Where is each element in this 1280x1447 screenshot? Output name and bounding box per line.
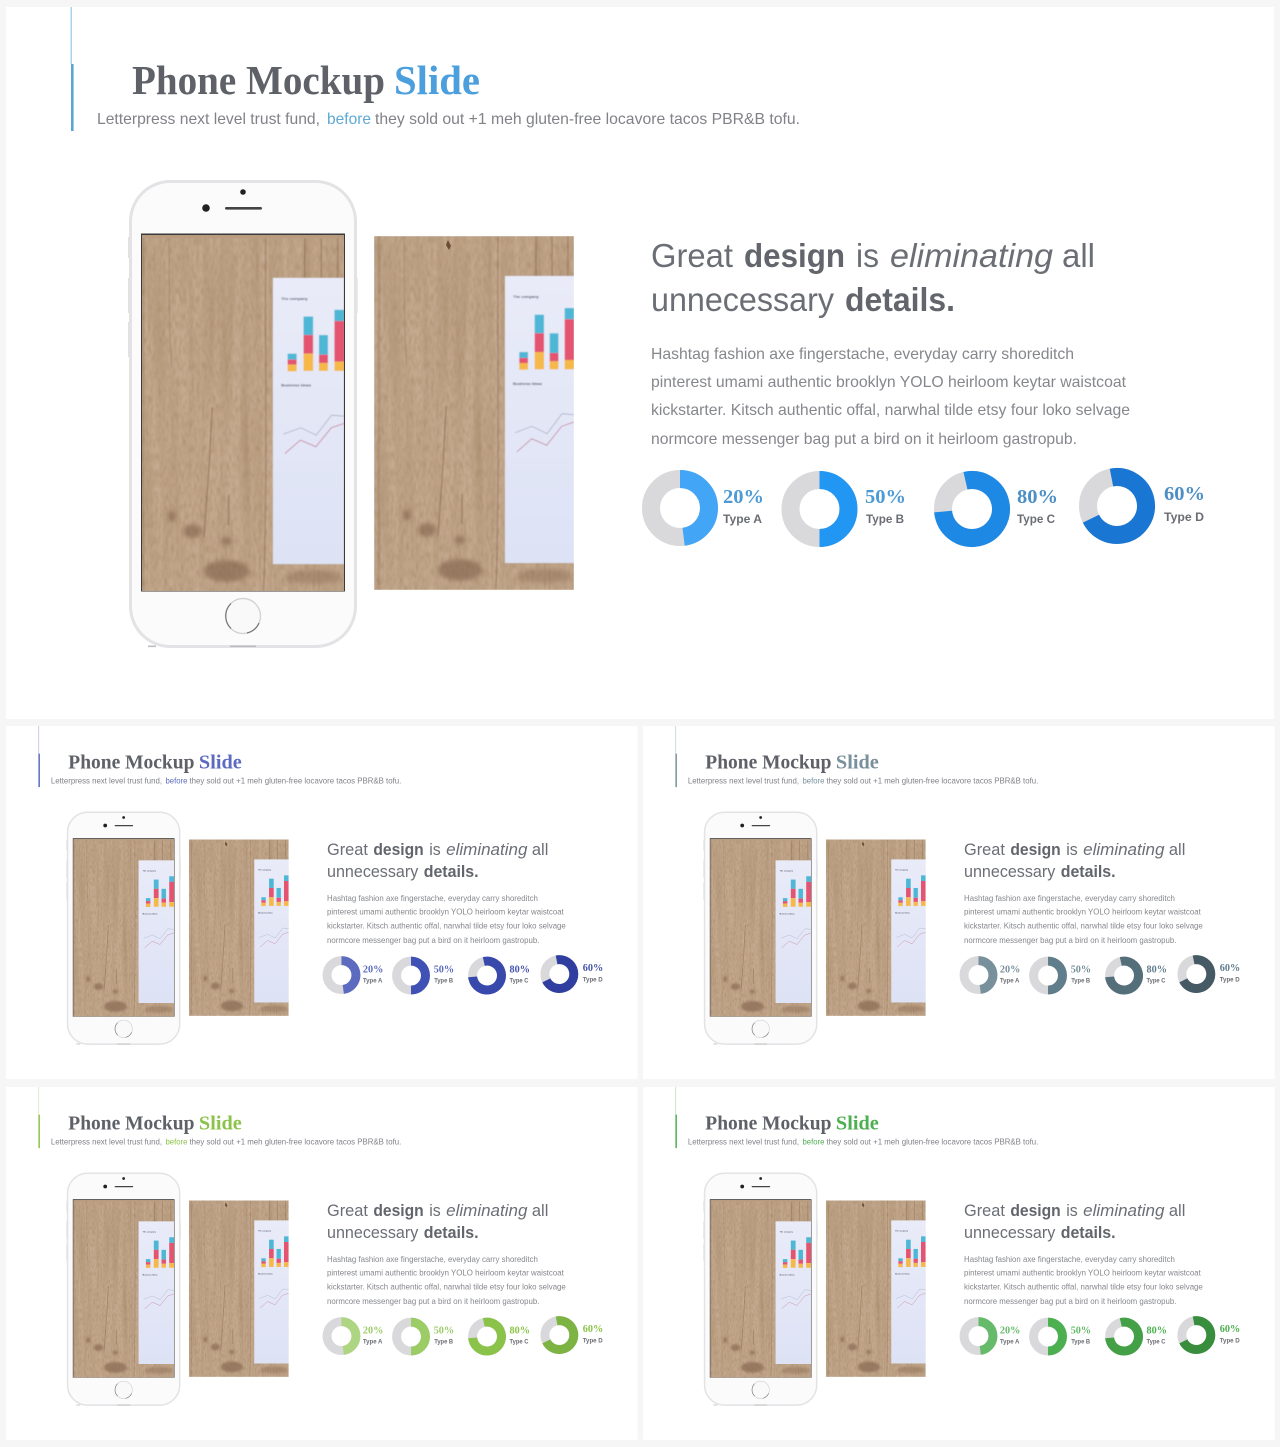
donut: Type C 80%	[470, 958, 530, 993]
heading: is	[1066, 1202, 1078, 1220]
title: Phone Mockup	[68, 1113, 194, 1135]
phone mockup	[128, 182, 358, 648]
heading: Great	[964, 841, 1005, 859]
photo	[189, 839, 289, 1016]
donut: Type A 20%: Type A	[363, 1340, 383, 1346]
donut: Type D 60%: 60%	[1220, 963, 1240, 974]
donut: Type B 50%	[1034, 1322, 1091, 1351]
donut: Type A 20%	[964, 961, 1020, 990]
accent line	[675, 726, 677, 787]
heading: is	[1066, 841, 1078, 859]
donut: Type C 80%: Type C	[1146, 979, 1166, 985]
body text: normcore messenger bag put a bird on it heirloom gastropub.	[651, 431, 1077, 448]
title: Slide	[836, 1113, 879, 1135]
heading: eliminating	[1083, 841, 1164, 859]
heading: details.	[1061, 1224, 1116, 1242]
donut: Type A 20%: 20%	[1000, 1326, 1020, 1337]
title: Slide	[199, 752, 242, 774]
heading	[651, 237, 1095, 318]
subtitle: they sold out +1 meh gluten-free locavore tacos PBR&B tofu.	[189, 1138, 401, 1147]
donut: Type B 50%: 50%	[1071, 1326, 1091, 1337]
body text	[964, 1255, 1203, 1306]
body text: kickstarter. Kitsch authentic offal, narwhal tilde etsy four loko selvage	[327, 1283, 566, 1292]
donut: Type D 60%: 60%	[583, 1324, 603, 1335]
donut: Type C 80%: 80%	[509, 965, 530, 976]
heading	[964, 841, 1185, 881]
heading: unnecessary	[327, 1224, 419, 1242]
donut: Type B 50%	[1034, 961, 1091, 990]
subtitle	[688, 777, 1038, 786]
photo	[374, 236, 574, 590]
donut: Type C 80%: 80%	[1146, 1326, 1167, 1337]
heading: eliminating	[890, 237, 1054, 274]
donut: Type C 80%	[1107, 1319, 1167, 1354]
subtitle: they sold out +1 meh gluten-free locavore tacos PBR&B tofu.	[826, 1138, 1038, 1147]
donut: Type A 20%: 20%	[363, 1326, 383, 1337]
donut: Type A 20%	[327, 961, 383, 990]
donut: Type B 50%: 50%	[434, 965, 454, 976]
donut: Type D 60%: Type D	[583, 978, 603, 984]
heading: Great	[964, 1202, 1005, 1220]
panel: small slide (blue-grey)	[643, 726, 1275, 1079]
heading: all	[532, 841, 548, 859]
donut: Type C 80%: Type C	[1017, 512, 1055, 526]
subtitle	[51, 1138, 401, 1147]
heading: design	[1010, 841, 1061, 859]
body text: kickstarter. Kitsch authentic offal, narwhal tilde etsy four loko selvage	[327, 922, 566, 931]
donut: Type D 60%	[1179, 1318, 1240, 1352]
heading: is	[856, 237, 879, 274]
body text: normcore messenger bag put a bird on it heirloom gastropub.	[327, 1297, 539, 1306]
panel: small slide (green)	[643, 1087, 1275, 1440]
body text: kickstarter. Kitsch authentic offal, narwhal tilde etsy four loko selvage	[651, 402, 1130, 419]
donut: Type D 60%: 60%	[1164, 483, 1205, 505]
donut: Type C 80%: 80%	[509, 1326, 530, 1337]
heading: design	[1010, 1202, 1061, 1220]
accent line	[70, 7, 74, 131]
subtitle: Letterpress next level trust fund,	[51, 777, 162, 786]
donut: Type D 60%	[542, 1318, 603, 1352]
title: Slide	[199, 1113, 242, 1135]
heading: all	[532, 1202, 548, 1220]
donut: Type A 20%: Type A	[363, 979, 383, 985]
photo	[189, 1200, 289, 1377]
body text: normcore messenger bag put a bird on it heirloom gastropub.	[327, 936, 539, 945]
donut: Type B 50%	[397, 1322, 454, 1351]
body text: pinterest umami authentic brooklyn YOLO heirloom keytar waistcoat	[651, 374, 1127, 391]
body text	[327, 1255, 566, 1306]
body text: Hashtag fashion axe fingerstache, everyday carry shoreditch	[964, 894, 1175, 903]
phone mockup	[703, 1173, 818, 1406]
heading: eliminating	[1083, 1202, 1164, 1220]
heading: Great	[651, 237, 733, 274]
body text	[964, 894, 1203, 945]
subtitle: before	[803, 777, 825, 786]
donut: Type A 20%: 20%	[723, 486, 764, 508]
heading: unnecessary	[327, 863, 419, 881]
panel: small slide (light green)	[6, 1087, 638, 1440]
donut: Type C 80%	[1107, 958, 1167, 993]
title: Phone Mockup	[132, 57, 385, 103]
donut: Type D 60%: 60%	[1220, 1324, 1240, 1335]
phone mockup	[66, 1173, 181, 1406]
body text: Hashtag fashion axe fingerstache, everyday carry shoreditch	[327, 894, 538, 903]
body text: Hashtag fashion axe fingerstache, everyday carry shoreditch	[327, 1255, 538, 1264]
panel: main slide (blue)	[6, 7, 1274, 719]
body text: kickstarter. Kitsch authentic offal, narwhal tilde etsy four loko selvage	[964, 922, 1203, 931]
heading: all	[1062, 237, 1095, 274]
subtitle: Letterpress next level trust fund,	[688, 777, 799, 786]
donut: Type D 60%: Type D	[1164, 510, 1204, 524]
heading: is	[429, 841, 441, 859]
heading: eliminating	[446, 841, 527, 859]
donut: Type A 20%: Type A	[1000, 979, 1020, 985]
heading: unnecessary	[964, 863, 1056, 881]
donut: Type C 80%: Type C	[509, 979, 529, 985]
donut: Type A 20%: 20%	[1000, 965, 1020, 976]
donut: Type D 60%	[1083, 472, 1205, 540]
heading: is	[429, 1202, 441, 1220]
donut: Type B 50%: Type B	[1071, 1340, 1091, 1346]
donut: Type A 20%: Type A	[1000, 1340, 1020, 1346]
donut: Type D 60%	[542, 957, 603, 991]
body text: pinterest umami authentic brooklyn YOLO heirloom keytar waistcoat	[964, 1269, 1202, 1278]
donut: Type D 60%	[1179, 957, 1240, 991]
title: Slide	[836, 752, 879, 774]
subtitle: Letterpress next level trust fund,	[97, 111, 320, 128]
heading	[327, 841, 548, 881]
heading: Great	[327, 1202, 368, 1220]
donut: Type B 50%: Type B	[866, 512, 904, 526]
heading	[964, 1202, 1185, 1242]
phone mockup	[703, 812, 818, 1045]
heading: all	[1169, 1202, 1185, 1220]
body text: Hashtag fashion axe fingerstache, everyday carry shoreditch	[651, 346, 1074, 363]
donut: Type C 80%	[470, 1319, 530, 1354]
donut: Type B 50%: 50%	[434, 1326, 454, 1337]
body text	[327, 894, 566, 945]
subtitle: Letterpress next level trust fund,	[688, 1138, 799, 1147]
donut: Type A 20%	[964, 1322, 1020, 1351]
heading: eliminating	[446, 1202, 527, 1220]
heading: unnecessary	[651, 281, 834, 318]
body text: normcore messenger bag put a bird on it heirloom gastropub.	[964, 936, 1176, 945]
heading: design	[373, 1202, 424, 1220]
title: Phone Mockup	[705, 752, 831, 774]
heading: details.	[424, 1224, 479, 1242]
body text: pinterest umami authentic brooklyn YOLO heirloom keytar waistcoat	[327, 908, 565, 917]
phone mockup	[66, 812, 181, 1045]
donut: Type A 20%: 20%	[363, 965, 383, 976]
donut: Type B 50%	[397, 961, 454, 990]
heading: design	[373, 841, 424, 859]
donut: Type B 50%: 50%	[1071, 965, 1091, 976]
heading: design	[744, 237, 845, 274]
heading	[327, 1202, 548, 1242]
donut: Type C 80%	[937, 474, 1058, 544]
body text: pinterest umami authentic brooklyn YOLO heirloom keytar waistcoat	[327, 1269, 565, 1278]
title: Phone Mockup	[68, 752, 194, 774]
accent line	[38, 1087, 40, 1148]
donut: Type D 60%: Type D	[583, 1339, 603, 1345]
donut: Type D 60%: 60%	[583, 963, 603, 974]
subtitle: they sold out +1 meh gluten-free locavore tacos PBR&B tofu.	[375, 111, 800, 128]
panel: small slide (indigo)	[6, 726, 638, 1079]
title: Slide	[394, 57, 480, 103]
subtitle: they sold out +1 meh gluten-free locavore tacos PBR&B tofu.	[826, 777, 1038, 786]
subtitle: before	[166, 777, 188, 786]
heading: Great	[327, 841, 368, 859]
donut: Type A 20%	[651, 479, 764, 537]
subtitle	[97, 111, 800, 128]
photo	[826, 839, 926, 1016]
accent line	[675, 1087, 677, 1148]
donut: Type D 60%: Type D	[1220, 978, 1240, 984]
subtitle	[688, 1138, 1038, 1147]
donut: Type A 20%	[327, 1322, 383, 1351]
donut: Type B 50%: Type B	[434, 979, 454, 985]
donut: Type B 50%: 50%	[865, 486, 906, 508]
heading: unnecessary	[964, 1224, 1056, 1242]
donut: Type B 50%	[790, 480, 906, 538]
donut: Type C 80%: Type C	[1146, 1340, 1166, 1346]
heading: details.	[424, 863, 479, 881]
subtitle: before	[803, 1138, 825, 1147]
donut: Type B 50%: Type B	[434, 1340, 454, 1346]
body text: Hashtag fashion axe fingerstache, everyday carry shoreditch	[964, 1255, 1175, 1264]
title: Phone Mockup	[705, 1113, 831, 1135]
body text	[651, 346, 1130, 448]
subtitle: Letterpress next level trust fund,	[51, 1138, 162, 1147]
body text: normcore messenger bag put a bird on it heirloom gastropub.	[964, 1297, 1176, 1306]
photo	[826, 1200, 926, 1377]
subtitle: they sold out +1 meh gluten-free locavore tacos PBR&B tofu.	[189, 777, 401, 786]
donut: Type A 20%: Type A	[723, 512, 762, 526]
body text: kickstarter. Kitsch authentic offal, narwhal tilde etsy four loko selvage	[964, 1283, 1203, 1292]
donut: Type D 60%: Type D	[1220, 1339, 1240, 1345]
donut: Type B 50%: Type B	[1071, 979, 1091, 985]
subtitle	[51, 777, 401, 786]
subtitle: before	[166, 1138, 188, 1147]
donut: Type C 80%: 80%	[1146, 965, 1167, 976]
heading: all	[1169, 841, 1185, 859]
body text: pinterest umami authentic brooklyn YOLO heirloom keytar waistcoat	[964, 908, 1202, 917]
donut: Type C 80%: 80%	[1017, 486, 1058, 508]
heading: details.	[1061, 863, 1116, 881]
subtitle: before	[327, 111, 371, 128]
donut: Type C 80%: Type C	[509, 1340, 529, 1346]
heading: details.	[845, 281, 955, 318]
accent line	[38, 726, 40, 787]
